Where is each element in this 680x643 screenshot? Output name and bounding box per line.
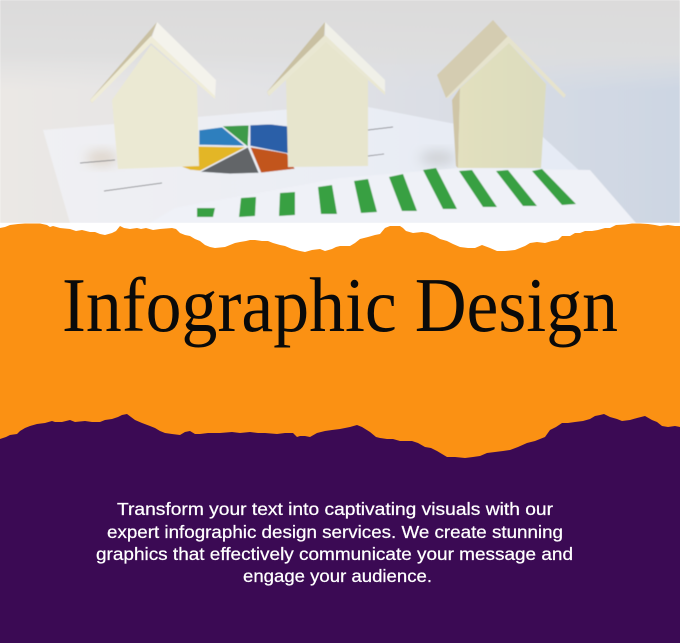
house 3 [437,20,566,168]
torn purple panel [0,414,680,643]
table surface [0,56,680,223]
description text [96,499,573,586]
shadow beside first house [86,151,118,165]
paper caption lines [80,127,393,191]
shadow beside third house [420,151,456,165]
wall background [0,0,680,71]
bar chart [197,168,576,217]
house 2 [267,22,385,167]
photo: wooden houses on printed charts [0,0,680,223]
pie chart [182,124,295,174]
description text: engage your audience. [243,566,432,586]
torn orange banner [0,224,680,475]
description text: graphics that effectively communicate your message and [96,544,573,564]
title: Infographic Design [62,262,618,348]
house 1 [90,22,216,169]
second chart sheet [438,169,635,222]
description text: expert infographic design services. We create stunning [107,522,563,542]
printed paper sheet [44,108,578,223]
description text: Transform your text into captivating visuals with our [117,499,553,519]
